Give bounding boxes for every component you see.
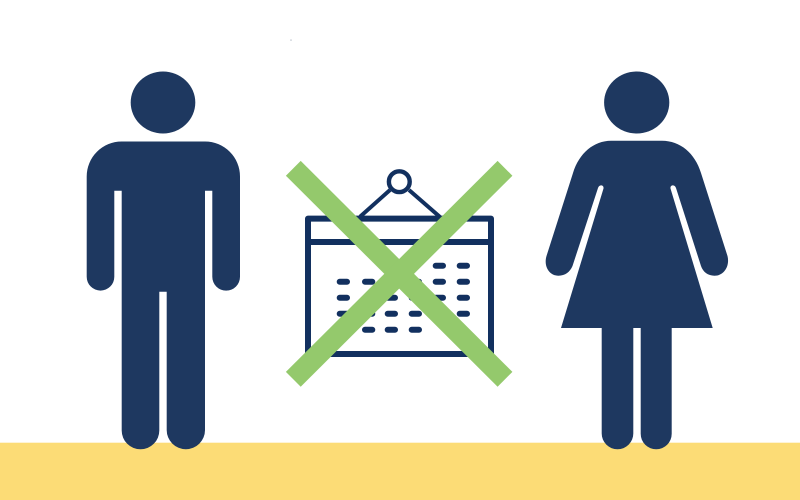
icon: man figure: [87, 72, 240, 449]
icon: green cross: [293, 168, 505, 379]
woman body and dress: [546, 141, 728, 328]
man head: [131, 72, 195, 134]
calendar hanger: [360, 171, 440, 217]
small speck: [290, 40, 292, 41]
calendar frame: [308, 219, 491, 354]
woman right leg: [641, 326, 672, 449]
icon: woman figure: [546, 72, 728, 449]
woman head: [604, 72, 669, 134]
icon: wall calendar: [308, 171, 491, 354]
man body: [87, 142, 240, 449]
calendar date dashes: [340, 266, 467, 330]
woman left leg: [602, 326, 633, 449]
yellow ground band: [0, 443, 800, 500]
